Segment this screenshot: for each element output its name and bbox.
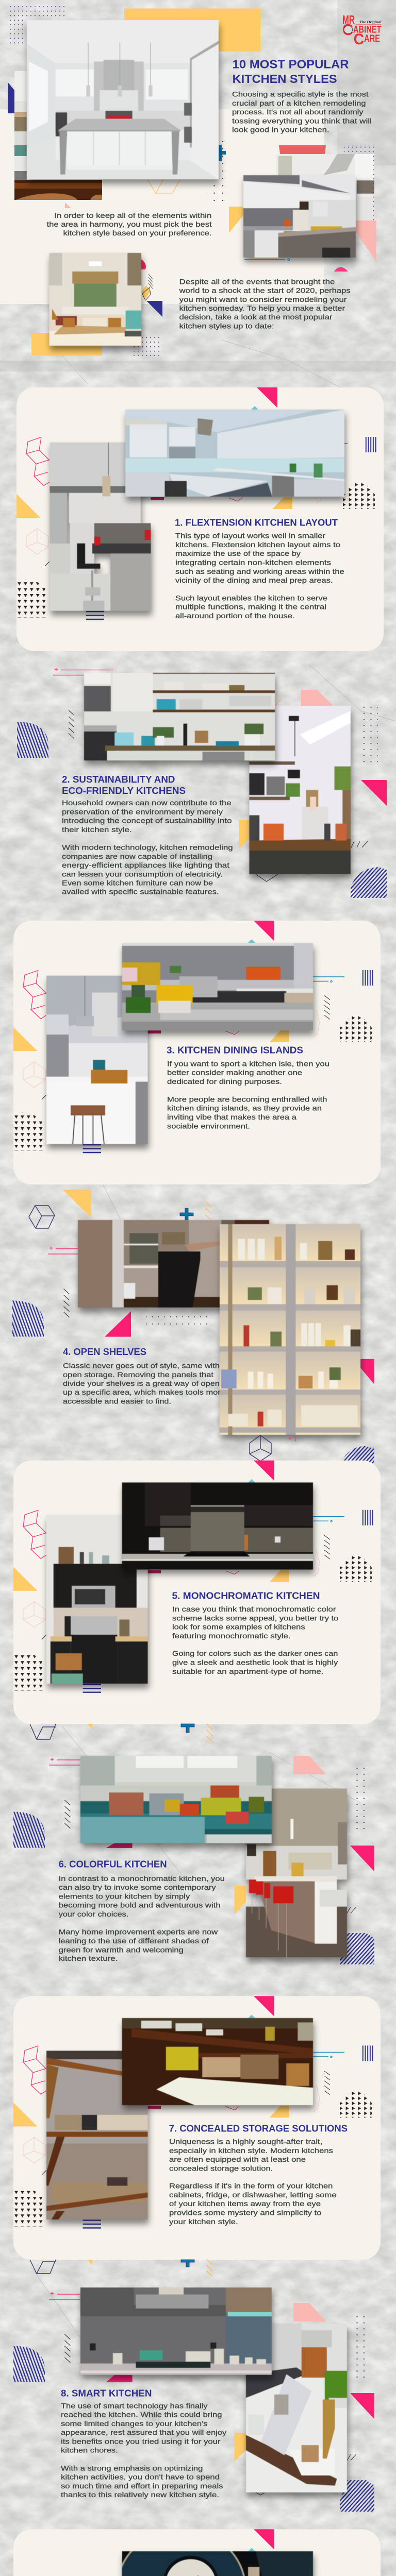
decoration: light pink wedge — [293, 2303, 326, 2321]
body text: inviting vibe that makes the area a — [167, 1113, 296, 1121]
body text: especially in kitchen style. Modern kitchens — [169, 2146, 333, 2155]
card with decorations — [13, 1461, 381, 1724]
body text: Going for colors such as the darker ones can — [172, 1649, 338, 1657]
decoration: blue line with dot — [244, 259, 290, 261]
decoration: dotted column — [365, 1281, 367, 1342]
heading: 2. SUSTAINABILITY AND — [62, 774, 175, 785]
photo: wide kitchen with lemons — [122, 943, 313, 1030]
body text: The use of smart technology has finally — [61, 2401, 208, 2410]
decoration: orange ticks — [207, 2260, 212, 2277]
body text — [167, 1059, 329, 1130]
text block: intro paragraph three — [179, 277, 351, 330]
heading: 6. COLORFUL KITCHEN — [59, 1859, 167, 1870]
decoration: purple dot square — [133, 336, 161, 356]
decoration: yellow outlined trapezoid — [147, 179, 180, 193]
photo: tablet on counter — [246, 2324, 347, 2493]
logo: top right: The Original — [359, 21, 382, 24]
text block: intro paragraph two: the area in harmony, you must pick the best — [47, 220, 212, 228]
decoration: striped dome clipped — [342, 1446, 374, 1464]
photo: tall white kitchen with stools — [50, 443, 151, 611]
decoration: partly hidden cube — [30, 2260, 56, 2274]
decoration: yellow block under photo — [31, 333, 102, 355]
decoration: yellow wedge — [239, 820, 249, 848]
body text — [63, 1361, 225, 1405]
decoration: pink wedge — [356, 221, 376, 262]
body text: all-around portion of the house. — [175, 612, 295, 620]
logo: top right: C — [342, 21, 353, 39]
decoration: black hatching — [64, 1800, 70, 1828]
photo: wide white kitchen with island — [125, 410, 344, 497]
card with decorations — [13, 921, 381, 1184]
heading: 3. KITCHEN DINING ISLANDS — [167, 1045, 303, 1056]
body text — [62, 799, 233, 896]
decoration: striped dome — [13, 1812, 45, 1848]
body text: such as seating and working areas within the — [175, 567, 344, 575]
body text: can lessen your consumption of electricity. — [62, 870, 223, 878]
heading — [62, 774, 186, 796]
decoration: partly hidden plus — [181, 1724, 194, 1733]
photo: woman cooking in kitchen — [243, 175, 356, 258]
decoration: dot grid — [362, 702, 378, 764]
heading: 5. MONOCHROMATIC KITCHEN — [172, 1591, 320, 1601]
body text: green for warmth and welcoming — [59, 1945, 184, 1954]
body text: provides some mystery and simplicity to — [169, 2209, 322, 2217]
decoration: partly hidden cube — [30, 1724, 56, 1739]
text block: intro paragraph one: tossing everything you think that will — [232, 116, 372, 125]
decoration: striped dome — [13, 2346, 45, 2382]
decoration: partly hidden yellow — [87, 2260, 92, 2265]
body text: Even some kitchen furniture can now be — [62, 879, 213, 887]
body text: open storage. Removing the panels that — [63, 1370, 213, 1379]
decoration: orange ticks — [205, 1201, 211, 1221]
body text: becoming more bold and adventurous with — [59, 1901, 221, 1909]
panel: 9 hot water traps — [13, 2529, 381, 2576]
decoration: purple dots on right — [344, 146, 375, 222]
icon: navy cube below photo — [250, 1435, 271, 1461]
body text: companies are now capable of installing — [62, 852, 212, 860]
body text: Such layout enables the kitchen to serve — [175, 594, 327, 602]
decoration: pink plus and lines — [49, 1758, 80, 1765]
text block: intro paragraph three: kitchen someday. To help you make a better — [179, 304, 345, 312]
body text: some limited changes to your kitchen's — [61, 2419, 208, 2428]
body text: look for some examples of kitchens — [172, 1623, 305, 1631]
body text: give a sleek and aesthetic look that is highly — [172, 1658, 338, 1666]
photo: tall bright kitchen with woman — [249, 706, 351, 874]
photo: tall shelves with ceramics — [46, 2050, 147, 2219]
decoration: striped dome — [17, 722, 48, 758]
text block: intro paragraph one: process. It's not all about randomly — [232, 108, 364, 116]
decoration: yellow wedge — [229, 207, 243, 233]
photo: main white kitchen — [27, 20, 219, 179]
body text: Regardless if it's in the form of your kitchen — [169, 2182, 333, 2190]
heading: ECO-FRIENDLY KITCHENS — [62, 786, 186, 796]
text block: intro paragraph one: look good in your kitchen. — [232, 126, 329, 134]
body text: In contrast to a monochromatic kitchen, you — [59, 1874, 225, 1883]
body text: thanks to this relatively new kitchen style. — [61, 2490, 219, 2499]
panel: 4 open shelves — [12, 1190, 374, 1464]
decoration: navy triangle — [146, 301, 162, 317]
body text: kitchen dining islands, as they provide an — [167, 1104, 322, 1112]
photo: kettle thermometer — [116, 2529, 313, 2576]
decoration: yellow and outlined diamond — [141, 285, 151, 300]
panel: intro beige background — [0, 109, 324, 304]
body text: integrating certain non-kitchen elements — [175, 558, 331, 567]
body text: preservation of the environment by merely — [62, 807, 223, 816]
photo: rear white kitchen cabinets — [279, 145, 326, 154]
decoration: striped dome — [12, 1300, 44, 1336]
decoration: striped dome right — [340, 1933, 374, 1964]
decoration: magenta trapezoid — [106, 2375, 133, 2382]
decoration: magenta trapezoid — [106, 1843, 133, 1848]
icon: navy cube — [29, 1206, 55, 1228]
decoration: light pink wedge — [301, 690, 333, 706]
body text: dedicated for dining purposes. — [167, 1077, 282, 1086]
decoration: light pink wedge — [293, 1756, 326, 1774]
decoration: dot rows — [146, 1313, 209, 1329]
decoration: pink plus and lines — [48, 1247, 78, 1254]
body text: their kitchen style. — [62, 825, 132, 834]
decoration: pink wedge — [360, 1359, 374, 1384]
panel: 3 kitchen dining islands — [13, 921, 381, 1184]
photo: tall kitchen with red stools — [246, 1788, 347, 1957]
body text: Uniqueness is a highly sought-after trait, — [169, 2138, 322, 2146]
body text: reached the kitchen. While this could bring — [61, 2411, 222, 2419]
decoration: black hatching — [148, 274, 153, 289]
body text: Classic never goes out of style, same with — [63, 1361, 220, 1369]
card with decorations — [13, 1996, 381, 2260]
body text: are often equipped with at least one — [169, 2155, 306, 2163]
body text: appearance, rest assured that you will enjoy — [61, 2428, 226, 2436]
body text: your color choices. — [59, 1910, 128, 1918]
text block: intro paragraph one: Choosing a specific style is the most — [232, 90, 369, 98]
body text: cabinets, fridge, or dishwasher, letting some — [169, 2191, 337, 2199]
body text: Household owners can now contribute to the — [62, 799, 232, 807]
text block: intro paragraph two — [47, 211, 212, 237]
body text — [175, 532, 344, 620]
panel: 2 sustainability and eco-friendly kitchens — [17, 668, 387, 898]
body text: can also try to invoke some contemporary — [59, 1883, 216, 1891]
body text: divide your shelves is a great way of open — [63, 1379, 220, 1387]
decoration: hatch — [351, 841, 368, 848]
body text: kitchen activities, you don't have to spend — [61, 2473, 220, 2481]
text block: intro paragraph two: In order to keep all of the elements within — [54, 211, 211, 219]
panel: 1 flextension kitchen layout — [16, 387, 384, 651]
heading: 4. OPEN SHELVES — [63, 1347, 146, 1357]
title: KITCHEN STYLES — [233, 72, 337, 86]
body text — [59, 1874, 225, 1962]
decoration: pink triangle — [105, 1311, 131, 1337]
text block: intro paragraph three: kitchen styles up to date: — [179, 321, 274, 330]
decoration: striped dome right — [340, 2480, 374, 2512]
body text: This type of layout works well in smaller — [175, 532, 325, 540]
decoration: pink triangle — [350, 2393, 374, 2419]
body text — [61, 2401, 226, 2499]
body text: of your kitchen items away from the eye — [169, 2199, 321, 2208]
body text: multiple functions, making it the central — [175, 603, 326, 611]
decoration: orange ticks — [207, 1724, 212, 1742]
body text: your kitchen style. — [169, 2217, 238, 2226]
logo: top right: C — [354, 31, 364, 48]
decoration: dot grid — [351, 1768, 367, 1831]
body text: In case you think that monochromatic color — [172, 1605, 336, 1613]
decoration: pink triangle — [361, 780, 387, 806]
body text: energy-efficient appliances like lighting that — [62, 861, 229, 869]
section: intro — [0, 6, 382, 356]
body text: kitchen chores. — [61, 2446, 118, 2454]
decoration: pink plus and lines — [53, 668, 113, 675]
body text: scheme lacks some appeal, you better try to — [172, 1614, 339, 1622]
decoration: pink triangle — [350, 1845, 374, 1872]
decoration: pink arc — [334, 267, 348, 272]
text block: intro paragraph one: crucial part of a kitchen remodeling — [232, 99, 366, 107]
decoration: hatch — [347, 1907, 356, 1913]
decoration: red circle behind photo — [141, 259, 146, 269]
body text: concealed storage solution. — [169, 2164, 273, 2172]
decoration: partly hidden plus — [181, 2260, 194, 2267]
body text: introducing the concept of sustainability into — [62, 817, 232, 825]
panel: 6 colorful kitchen — [13, 1724, 374, 1964]
heading: 8. SMART KITCHEN — [61, 2388, 152, 2399]
decoration: black hatching — [69, 710, 74, 739]
photo: tall kitchen with black cabinets — [46, 1515, 147, 1684]
photo: glowing pantry shelves — [220, 1224, 360, 1435]
text block: intro paragraph two: kitchen style based on your preference. — [63, 229, 211, 237]
decoration: striped dome right — [351, 867, 387, 898]
decoration: pink triangle — [65, 202, 71, 208]
decoration: purple dot grid — [8, 6, 66, 46]
panel: 5 monochromatic kitchen — [13, 1461, 381, 1724]
photo: backdrop kitchen with wood counter — [14, 71, 102, 200]
title: 10 MOST POPULAR — [233, 58, 349, 71]
title — [233, 58, 349, 86]
text block: intro paragraph three: Despite all of the events that brought the — [179, 277, 335, 285]
panel: 8 smart kitchen — [13, 2260, 374, 2512]
heading: 7. CONCEALED STORAGE SOLUTIONS — [169, 2124, 348, 2134]
heading: 1. FLEXTENSION KITCHEN LAYOUT — [175, 517, 338, 528]
photo: tall kitchen with pendant — [46, 976, 147, 1144]
photo: subway tile kitchen with open shelves — [84, 673, 275, 760]
decoration: orange tick — [275, 699, 281, 705]
body text — [172, 1605, 339, 1675]
body text: featuring monochromatic style. — [172, 1632, 291, 1640]
body text: better consider making another one — [167, 1069, 302, 1077]
photo: wide kitchen with fruit on teal counter — [80, 1756, 272, 1843]
decoration: pink plus and lines — [49, 2292, 80, 2299]
decoration: yellow triangle — [63, 1190, 91, 1217]
decoration: blue plus — [219, 145, 226, 161]
body text: so much time and effort in preparing meals — [61, 2482, 223, 2490]
decoration: dot grid — [351, 2315, 367, 2378]
body text — [169, 2138, 337, 2226]
logo: top right: ABINET — [353, 24, 382, 35]
decoration: navy tip — [256, 2493, 265, 2495]
decoration: dotted columns — [206, 135, 226, 204]
photo: wide dark kitchen — [122, 1482, 313, 1569]
body text: If you want to sport a kitchen isle, then you — [167, 1059, 329, 1067]
photo: man reaching into pantry — [78, 1220, 269, 1308]
decoration: pink plus and line — [288, 1435, 296, 1442]
decoration: yellow wedge — [234, 1886, 246, 1914]
logo: top right: MR — [342, 13, 355, 26]
icon: blue plus — [180, 1208, 193, 1220]
body text: leaning to the use of different shades of — [59, 1937, 209, 1945]
text block: intro paragraph three: you might want to consider remodeling your — [179, 295, 347, 303]
body text: kitchens. Flextension kitchen layout aims to — [175, 540, 340, 549]
decoration: partly hidden yellow — [87, 1724, 92, 1729]
decoration: black hatching — [63, 1289, 69, 1317]
photo: wide concrete kitchen with hood — [80, 2287, 272, 2375]
decoration: hatch — [347, 2454, 356, 2461]
text block: intro paragraph one — [232, 90, 372, 134]
decoration: navy diamond tip — [256, 874, 278, 882]
body text: up a specific area, which makes tools more — [63, 1388, 225, 1396]
card with decorations — [13, 2529, 381, 2576]
body text: its benefits once you tried using it for your — [61, 2437, 221, 2445]
card with decorations — [16, 387, 384, 651]
body text: With modern technology, kitchen remodeling — [62, 843, 233, 851]
text block: intro paragraph three: world to a shock at the start of 2020, perhaps — [179, 286, 351, 295]
body text: kitchen texture. — [59, 1954, 118, 1962]
photo: breakfast kitchen — [50, 253, 141, 346]
body text: accessible and easier to find. — [63, 1397, 171, 1405]
body text: vicinity of the dining and meal prep areas. — [175, 576, 333, 584]
decoration: black hatching — [64, 2334, 70, 2363]
body text: elements to your kitchen by simply — [59, 1892, 190, 1900]
decoration: yellow corner block — [124, 8, 260, 52]
body text: availed with specific sustainable features. — [62, 888, 219, 896]
body text: suitable for an apartment-type of home. — [172, 1667, 323, 1675]
body text: With a strong emphasis on optimizing — [61, 2464, 203, 2472]
logo: top right — [342, 13, 382, 48]
panel: 7 concealed storage solutions — [13, 1996, 381, 2260]
photo: wide wooden cabinet — [122, 2018, 313, 2105]
text block: intro paragraph three: decision, take a look at the most popular — [179, 313, 333, 321]
decoration: yellow wedge — [234, 2433, 246, 2462]
body text: More people are becoming enthralled with — [167, 1095, 327, 1103]
body text: maximize the use of the space by — [175, 549, 301, 557]
logo: top right: ARE — [364, 33, 380, 44]
decoration: navy wedge — [8, 82, 14, 113]
body text: Many home improvement experts are now — [59, 1928, 218, 1936]
body text: sociable environment. — [167, 1122, 250, 1130]
